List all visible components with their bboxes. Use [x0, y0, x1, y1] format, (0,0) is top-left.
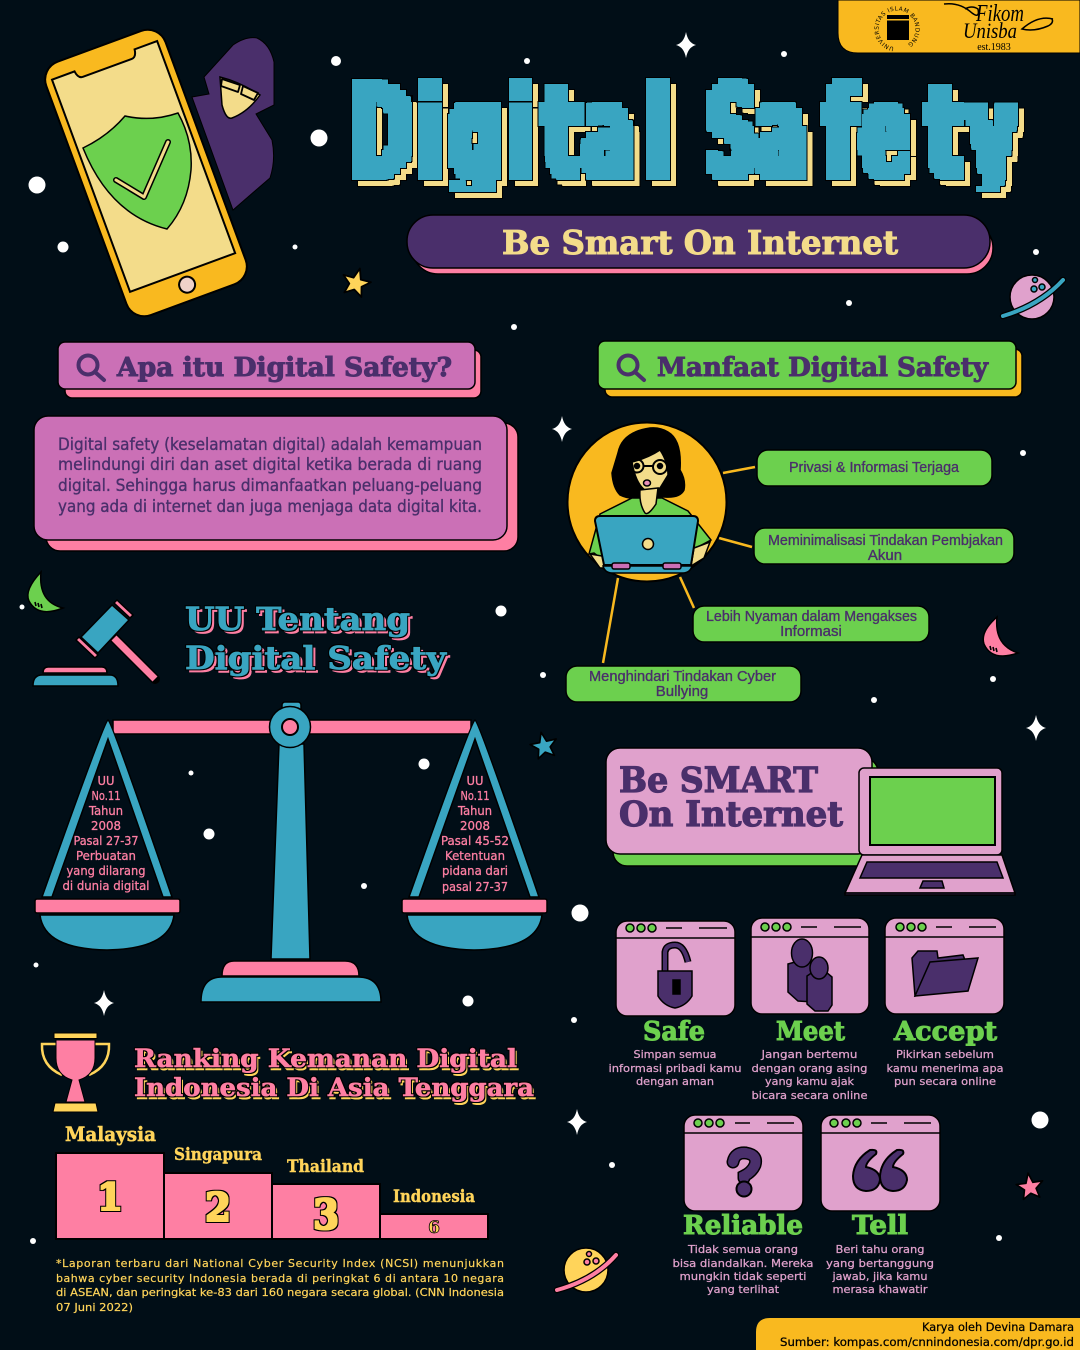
logo badge — [838, 0, 1080, 54]
left pan text: di dunia digital — [62, 879, 150, 893]
footer credit — [756, 1318, 1080, 1350]
left pan — [35, 720, 180, 950]
left pan text: UU — [98, 774, 114, 788]
connector lines — [603, 467, 755, 663]
card: Meet: Meet — [776, 1017, 845, 1047]
card: Safe: informasi pribadi kamu — [608, 1062, 742, 1075]
right pan text: Ketentuan — [445, 849, 505, 863]
heading: Apa itu Digital Safety — [58, 342, 481, 398]
footnote: bahwa cyber security Indonesia berada di peringkat 6 di antara 10 negara — [56, 1272, 504, 1285]
shirt and arms — [589, 498, 711, 565]
bar: Singapura: Singapura — [174, 1145, 262, 1165]
card: Tell: Tell — [852, 1211, 908, 1241]
bar: Malaysia — [56, 1122, 164, 1239]
right pan text: Tahun — [457, 804, 492, 818]
face — [632, 450, 668, 492]
card: Reliable: bisa diandalkan. Mereka — [672, 1257, 814, 1270]
window: lock — [616, 921, 735, 1016]
icon: gavel — [33, 600, 155, 686]
university seal text: UNIVERSITAS ISLAM BANDUNG — [874, 6, 920, 52]
card: Accept: pun secara online — [894, 1075, 996, 1088]
callout: Privasi: Privasi & Informasi Terjaga — [789, 459, 960, 476]
right pan text — [441, 774, 509, 894]
heading: Apa itu Digital Safety: Apa itu Digital Safety? — [116, 353, 452, 383]
card: Reliable: yang terlihat — [707, 1283, 780, 1296]
callout: Menghindari: Bullying — [656, 683, 708, 700]
card: Safe: dengan aman — [636, 1075, 714, 1088]
icon: green crescent moon — [28, 572, 63, 612]
heading: Manfaat Digital Safety: Manfaat Digital Safety — [657, 353, 989, 383]
card: Tell: yang bertanggung — [826, 1257, 934, 1270]
chart: ranking podium — [56, 1122, 488, 1239]
panel: Be SMART On Internet — [606, 748, 878, 866]
icon: yellow star — [339, 265, 374, 298]
panel: Be SMART On Internet: On Internet — [619, 794, 843, 835]
footer credit: Karya oleh Devina Damara — [922, 1320, 1074, 1334]
footnote: di ASEAN, dan peringkat ke-83 dari 160 negara secara global. (CNN Indonesia — [56, 1286, 504, 1299]
card: Meet: dengan orang asing — [752, 1062, 868, 1075]
icon: magnifier — [78, 356, 104, 380]
window: folder — [885, 918, 1004, 1014]
callout: Meminimalisasi — [754, 528, 1014, 564]
illustration: phone with shield and hooded hacker — [40, 24, 274, 322]
heading: UU Tentang Digital Safety: UU Tentang — [185, 600, 410, 638]
definition text: melindungi diri dan aset digital ketika berada di ruang — [58, 455, 482, 474]
card: Tell — [821, 1115, 940, 1296]
panel: definition — [34, 416, 518, 551]
heading: ranking: Ranking Kemanan Digital — [134, 1044, 517, 1073]
callout: Menghindari — [566, 666, 801, 702]
card: Meet: bicara secara online — [752, 1089, 868, 1102]
card: Safe: Simpan semua — [634, 1048, 716, 1061]
title: Digital Safety — [352, 57, 1016, 207]
right pan text: 2008 — [460, 819, 490, 833]
heading: ranking — [134, 1044, 534, 1102]
left pan text: No.11 — [92, 789, 120, 803]
laptop — [595, 516, 698, 565]
footer credit: Sumber: kompas.com/cnnindonesia.com/dpr.go.id — [780, 1335, 1074, 1349]
card: Reliable: Reliable — [683, 1211, 803, 1241]
left pan text: 2008 — [91, 819, 121, 833]
hair — [612, 428, 684, 498]
callout: Meminimalisasi: Meminimalisasi Tindakan Pembjakan — [768, 532, 1003, 549]
icon: pink star — [1015, 1171, 1045, 1200]
icon: lilac planet — [1003, 275, 1063, 319]
definition text: yang ada di internet dan juga menjaga data digital kita. — [58, 497, 482, 516]
left pan text: Pasal 27-37 — [74, 834, 138, 848]
icon: pink crescent moon — [983, 617, 1018, 656]
logo badge: Fikom — [975, 1, 1024, 27]
callout: Lebih Nyaman: Informasi — [780, 623, 842, 640]
card: Meet — [751, 918, 869, 1102]
right pan — [402, 720, 547, 950]
card: Tell: jawab, jika kamu — [831, 1270, 928, 1283]
card: Accept: Accept — [893, 1017, 997, 1047]
callout: Lebih Nyaman — [693, 606, 929, 642]
logo badge: Unisba — [963, 18, 1017, 43]
icon: yellow planet — [557, 1248, 616, 1292]
shield with check — [83, 113, 191, 229]
footnote: 07 Juni 2022) — [56, 1301, 133, 1314]
subtitle pill: Be Smart On Internet — [502, 223, 899, 262]
card: Accept: kamu menerima apa — [886, 1062, 1004, 1075]
right pan text: pasal 27-37 — [442, 880, 508, 894]
bar: Indonesia: Indonesia — [393, 1187, 475, 1207]
bar: Thailand: Thailand — [287, 1157, 364, 1177]
card: Meet: yang kamu ajak — [765, 1075, 855, 1088]
logo badge: est.1983 — [977, 42, 1011, 53]
definition text: digital. Sehingga harus dimanfaatkan peluang-peluang — [58, 476, 482, 495]
bar: Thailand — [272, 1157, 380, 1239]
panel: Be SMART On Internet: Be SMART — [619, 760, 818, 801]
bar: Indonesia: 6 — [428, 1218, 440, 1238]
left pan text: yang dilarang — [66, 864, 146, 878]
callout: Lebih Nyaman: Lebih Nyaman dalam Mengakses — [706, 608, 917, 625]
illustration: woman with laptop — [568, 422, 726, 582]
left pan text: Tahun — [88, 804, 123, 818]
right pan text: No.11 — [460, 789, 490, 803]
right pan text: UU — [466, 774, 484, 788]
icon: magnifier — [618, 356, 644, 380]
left pan text: Perbuatan — [76, 849, 136, 863]
heading: UU Tentang Digital Safety — [185, 600, 448, 677]
bar: Indonesia — [380, 1187, 488, 1239]
definition text — [58, 435, 482, 516]
icon: laptop — [845, 768, 1015, 895]
card: Accept: Pikirkan sebelum — [896, 1048, 994, 1061]
card: Tell: Beri tahu orang — [836, 1243, 924, 1256]
heading: Manfaat Digital Safety — [598, 341, 1022, 397]
illustration: balance scale — [35, 702, 547, 1002]
definition text: Digital safety (keselamatan digital) adalah kemampuan — [58, 435, 482, 454]
card: Meet: Jangan bertemu — [760, 1048, 858, 1061]
bar: Thailand: 3 — [313, 1191, 339, 1239]
callout: Privasi — [757, 450, 992, 486]
right pan text: Pasal 45-52 — [441, 834, 509, 848]
bar: Singapura: 2 — [205, 1185, 231, 1231]
beam and column — [113, 702, 471, 1002]
left pan text — [62, 774, 150, 893]
window: question mark — [684, 1115, 803, 1211]
card: Reliable: mungkin tidak seperti — [680, 1270, 806, 1283]
right pan text: pidana dari — [442, 864, 508, 878]
card: Tell: merasa khawatir — [832, 1283, 928, 1296]
bar: Malaysia: Malaysia — [65, 1122, 156, 1146]
card: Reliable — [672, 1115, 814, 1296]
card: Safe — [608, 921, 742, 1088]
window: people — [751, 918, 869, 1014]
window: quotation marks — [821, 1115, 940, 1211]
bar: Malaysia: 1 — [97, 1175, 123, 1219]
footnote: *Laporan terbaru dari National Cyber Security Index (NCSI) menunjukkan — [56, 1257, 504, 1270]
callout: Meminimalisasi: Akun — [868, 547, 902, 564]
hacker figure — [192, 38, 274, 210]
card: Safe: Safe — [643, 1017, 705, 1047]
footnote — [56, 1257, 504, 1314]
phone body — [40, 24, 252, 322]
card: Accept — [885, 918, 1004, 1088]
heading: UU Tentang Digital Safety: Digital Safety — [185, 639, 448, 677]
callout: Menghindari: Menghindari Tindakan Cyber — [589, 668, 776, 685]
heading: ranking: Indonesia Di Asia Tenggara — [134, 1073, 534, 1102]
bar: Singapura — [164, 1145, 272, 1239]
card: Reliable: Tidak semua orang — [687, 1243, 798, 1256]
icon: teal star — [528, 730, 559, 760]
icon: trophy — [42, 1033, 109, 1112]
subtitle pill — [407, 215, 993, 274]
